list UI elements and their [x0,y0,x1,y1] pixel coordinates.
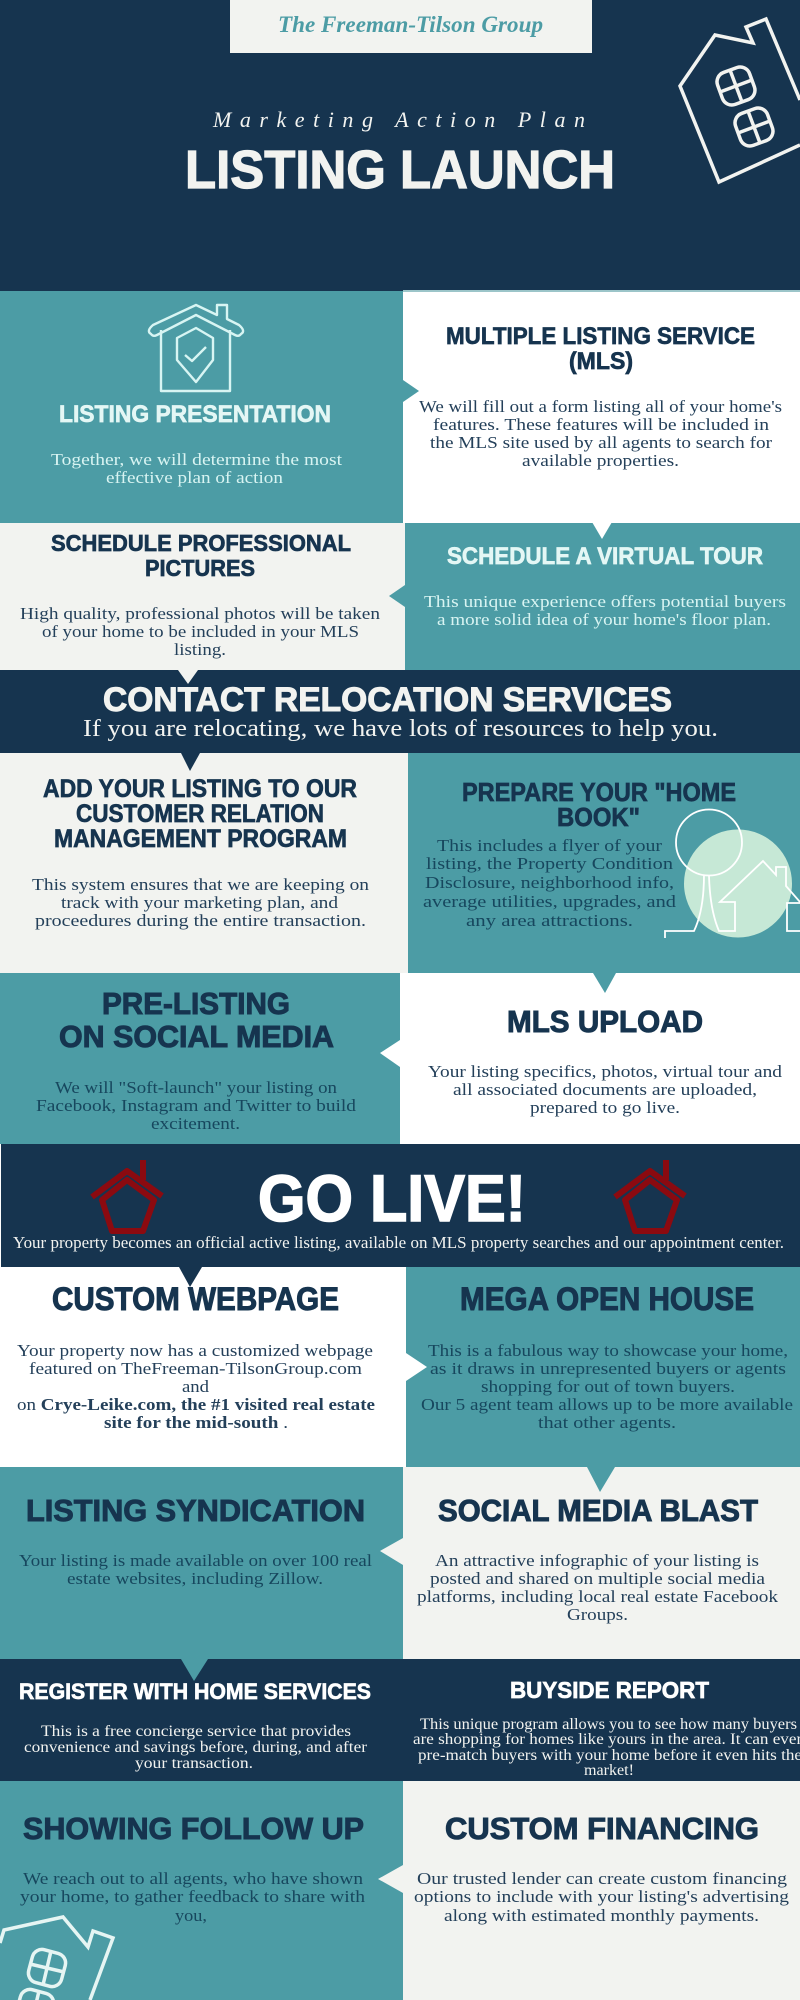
text block: posted and shared on multiple social media [430,1569,766,1588]
heading: SCHEDULE A VIRTUAL TOUR [447,543,763,570]
heading: PREPARE YOUR "HOME [462,777,736,807]
text block [428,1062,783,1117]
text block [32,875,370,930]
panel: schedule professional pictures [0,523,405,670]
heading: BUYSIDE REPORT [510,1677,709,1703]
text block: estate websites, including Zillow. [67,1569,323,1588]
text block: site for the mid-south . [104,1413,288,1432]
text block: Your listing specifics, photos, virtual tour and [428,1062,783,1081]
arrow: teal pointing left [389,585,405,607]
panel: contact relocation services [0,670,800,753]
text block: effective plan of action [106,468,284,487]
panel: mls upload [400,973,800,1144]
text block: listing. [174,640,226,659]
text block: Facebook, Instagram and Twitter to build [36,1096,357,1115]
heading: CUSTOM FINANCING [445,1811,759,1846]
text block [413,1716,800,1779]
heading: SCHEDULE PROFESSIONAL [51,530,351,556]
heading: LISTING PRESENTATION [59,401,331,428]
text block [424,592,786,629]
text block [24,1723,368,1772]
text block: on Crye-Leike.com, the #1 visited real estate [17,1395,376,1414]
text block: along with estimated monthly payments. [444,1906,759,1925]
arrow: navy pointing down [181,753,200,771]
heading: ON SOCIAL MEDIA [59,1019,334,1054]
text block: of your home to be included in your MLS [42,622,359,641]
text block: Disclosure, neighborhood info, [425,873,674,892]
text block: Our 5 agent team allows up to be more available [421,1395,793,1414]
arrow: teal pointing down [593,973,616,993]
text block: Your property now has a customized webpage [17,1341,373,1360]
text block: This is a free concierge service that provides [41,1723,351,1740]
text block: as it draws in unrepresented buyers or agents [430,1359,786,1378]
text block: An attractive infographic of your listing is [435,1551,759,1570]
text block: all associated documents are uploaded, [453,1080,757,1099]
text block: your home, to gather feedback to share with [20,1887,366,1906]
panel: customer relation management [0,753,408,973]
subtitle: Marketing Action Plan [212,107,585,132]
arrow: teal pointing down [587,1467,615,1492]
heading: SOCIAL MEDIA BLAST [438,1493,758,1528]
text block: average utilities, upgrades, and [423,892,677,911]
heading: PRE-LISTING [102,986,290,1021]
arrow: teal pointing right [403,380,419,402]
text block: High quality, professional photos will be taken [20,604,381,623]
heading [462,777,736,832]
heading: CUSTOM WEBPAGE [52,1281,339,1317]
text block: We reach out to all agents, who have shown [23,1869,364,1888]
title: LISTING LAUNCH [185,140,615,200]
panel: header [0,0,800,291]
heading: (MLS) [569,348,633,375]
text block: available properties. [522,451,679,470]
text block: excitement. [151,1114,240,1133]
text block: Your property becomes an official active listing, available on MLS property searches and our appointment center. [13,1233,784,1252]
panel: buyside report [403,1659,800,1781]
text block: Your listing is made available on over 100 real [19,1551,372,1570]
company name box [230,0,592,53]
text block: any area attractions. [466,911,633,930]
text block: pre-match buyers with your home before it even hits the [418,1747,800,1764]
heading: MANAGEMENT PROGRAM [54,825,347,853]
arrow: white pointing left [380,1040,400,1067]
arrow: pale pointing down [178,670,198,684]
text block: a more solid idea of your home's floor plan. [437,610,771,629]
icon: house outline top right [680,19,800,182]
text block: are shopping for homes like yours in the area. It can even [413,1731,800,1748]
heading: SHOWING FOLLOW UP [23,1811,364,1846]
panel: custom financing [403,1781,800,2000]
text block: track with your marketing plan, and [61,893,339,912]
text block: prepared to go live. [530,1098,680,1117]
arrow: white pointing right [406,1353,427,1381]
text block: This includes a flyer of your [437,836,662,855]
text block: proceedures during the entire transaction. [35,911,366,930]
icon: red house right [615,1160,685,1231]
panel: multiple listing service [403,290,800,523]
text block [417,1551,779,1624]
panel: pre-listing on social media [0,973,400,1144]
text block [17,1341,376,1432]
icon: red house left [92,1160,162,1231]
arrow: navy pointing down [179,1267,202,1287]
text block [51,450,342,487]
text block: platforms, including local real estate Facebook [417,1587,779,1606]
heading: MEGA OPEN HOUSE [460,1281,754,1317]
panel: go live [0,1144,800,1267]
panel: social media blast [403,1467,800,1659]
text block [20,1869,366,1925]
text block: If you are relocating, we have lots of resources to help you. [83,716,718,742]
text block: featured on TheFreeman-TilsonGroup.com [29,1359,362,1378]
panel: showing follow up [0,1781,403,2000]
heading [59,986,334,1054]
heading: GO LIVE! [258,1161,526,1235]
text block: We will fill out a form listing all of your home's [419,397,782,416]
company name box: The Freeman-Tilson Group [278,12,543,37]
text block: listing, the Property Condition [426,854,674,873]
text block: shopping for out of town buyers. [481,1377,735,1396]
heading: PICTURES [145,555,255,581]
heading: CUSTOMER RELATION [76,800,324,828]
panel: schedule a virtual tour [405,523,800,670]
text block: This unique program allows you to see how many buyers [420,1716,797,1733]
heading: REGISTER WITH HOME SERVICES [19,1679,371,1704]
heading [446,323,755,375]
illustration: tree and house [665,810,800,938]
text block: We will "Soft-launch" your listing on [55,1078,338,1097]
text block: Together, we will determine the most [51,450,342,469]
text block [20,604,381,659]
heading: ADD YOUR LISTING TO OUR [43,775,357,803]
text block: This system ensures that we are keeping on [32,875,370,894]
text block: features. These features will be included in [433,415,770,434]
heading [43,775,357,853]
heading: LISTING SYNDICATION [26,1493,365,1528]
text block [19,1551,372,1588]
heading: MULTIPLE LISTING SERVICE [446,323,755,350]
text block: This unique experience offers potential buyers [424,592,786,611]
text block: This is a fabulous way to showcase your home, [428,1341,788,1360]
panel: custom webpage [0,1267,406,1467]
heading: MLS UPLOAD [507,1004,703,1039]
arrow: pale pointing left [380,1538,403,1565]
icon: house with shield [149,305,243,391]
text block: convenience and savings before, during, and after [24,1739,368,1756]
text block [414,1869,790,1925]
icon: house outline bottom left [0,1917,113,2000]
text block: Groups. [567,1605,628,1624]
text block: your transaction. [135,1755,253,1772]
text block [423,836,677,930]
text block [421,1341,793,1432]
panel: prepare your home book [408,753,800,973]
panel: listing presentation [0,291,403,523]
text block: the MLS site used by all agents to search for [430,433,772,452]
heading [51,530,351,581]
text block [36,1078,357,1133]
panel: mega open house [406,1267,800,1467]
panel: listing syndication [0,1467,403,1659]
heading: BOOK" [557,802,640,832]
arrow: pale pointing left [378,1865,403,1893]
arrow: white pointing down [592,522,612,539]
text block: market! [584,1762,634,1779]
text block: Our trusted lender can create custom financing [417,1869,788,1888]
panel: register with home services [0,1659,403,1781]
text block: you, [175,1906,207,1925]
arrow: teal pointing down [181,1659,208,1681]
text block: options to include with your listing's advertising [414,1887,790,1906]
heading: CONTACT RELOCATION SERVICES [103,681,672,719]
text block: and [182,1377,210,1396]
text block [419,397,782,470]
text block: that other agents. [538,1413,676,1432]
